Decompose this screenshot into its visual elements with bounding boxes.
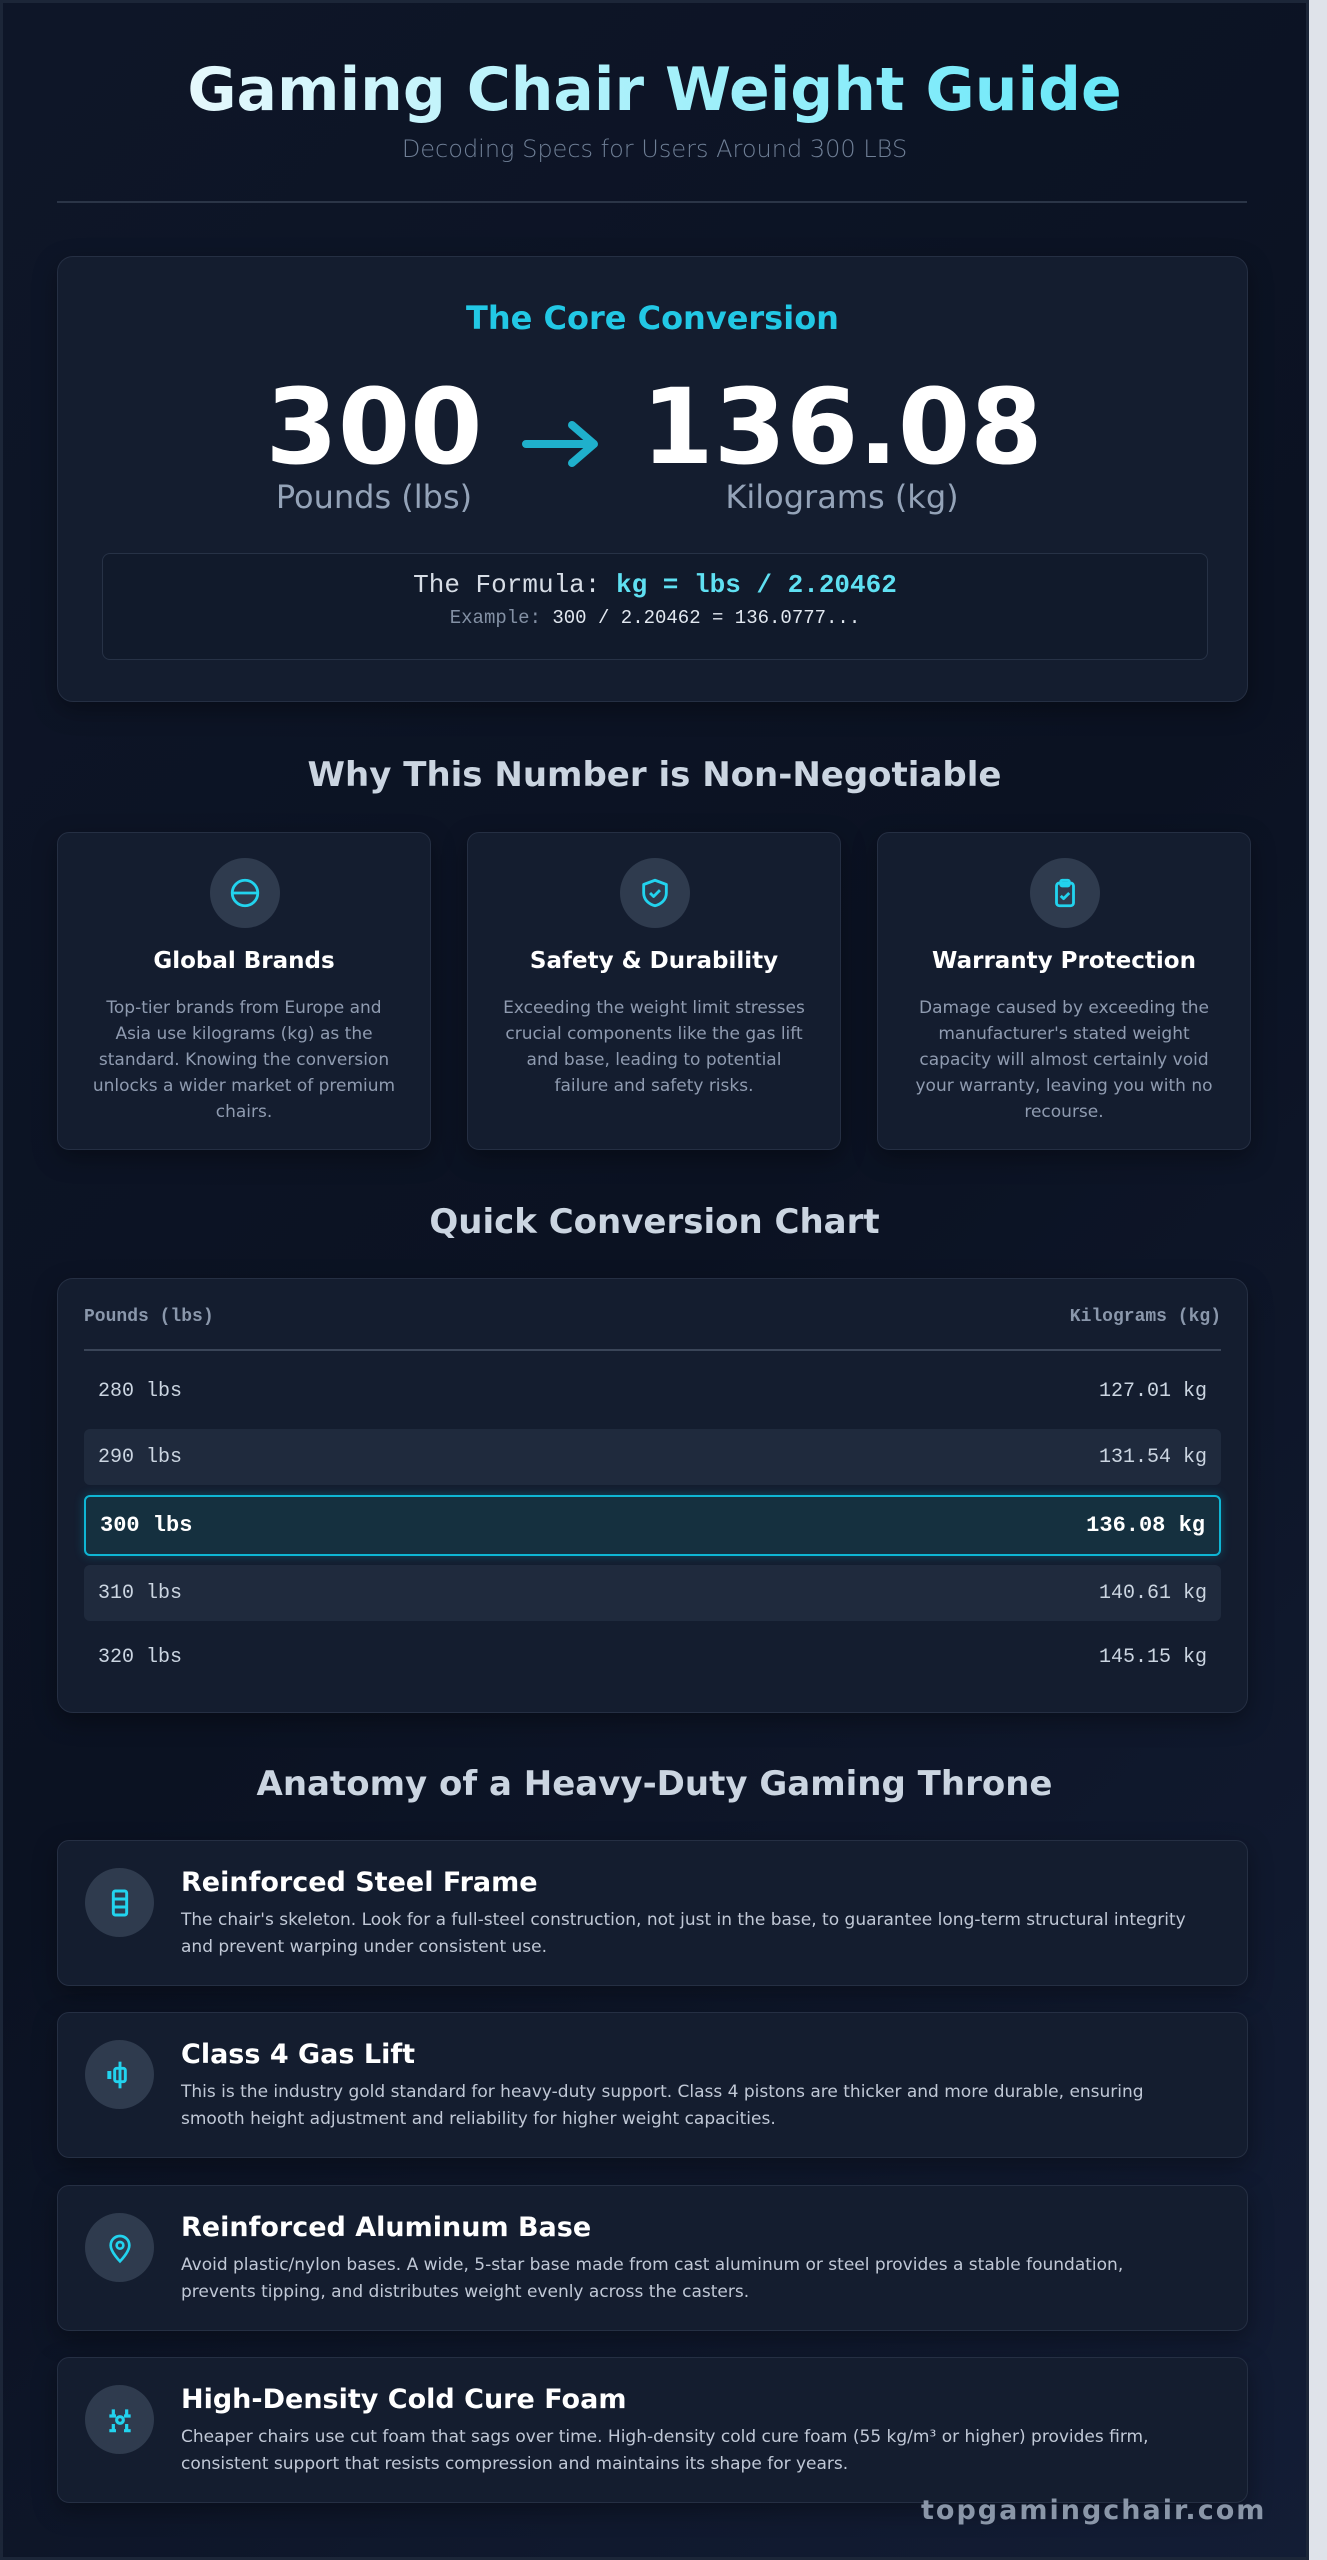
card: foam: High-Density Cold Cure Foam (181, 2384, 626, 2415)
title: Gaming Chair Weight Guide (187, 55, 1122, 125)
formula box (102, 553, 1208, 660)
icon: foam (85, 2385, 154, 2454)
table header: Kilograms (kg) (1070, 1307, 1221, 1327)
card: gas lift: Class 4 Gas Lift (181, 2039, 415, 2070)
row 280 (98, 1380, 1207, 1402)
number: 136.08 kg: Kilograms (kg) (725, 478, 959, 516)
card: foam: Cheaper chairs use cut foam that sags over time. High-density cold cure foam (55 kg/m³ or higher) provides firm, consistent support that resists compression and maintains its shape for years. (181, 2427, 1148, 2474)
card: steel frame: The chair's skeleton. Look for a full-steel construction, not just in the base, to guarantee long-term structural integrity and prevent warping under consistent use. (181, 1910, 1186, 1957)
icon: globe (210, 858, 280, 928)
row 320 (98, 1646, 1207, 1668)
card: safety: Exceeding the weight limit stresses crucial components like the gas lift and base, leading to potential failure and safety risks. (503, 998, 805, 1096)
formula box: The Formula: kg = lbs / 2.20462 (413, 570, 897, 600)
row 310: 310 lbs (98, 1582, 182, 1604)
number: 300 lbs: 300 (265, 366, 483, 488)
icon: clipboard (1030, 858, 1100, 928)
row 300 highlighted: 300 lbs (100, 1513, 192, 1538)
card: gas lift (57, 2012, 1248, 2158)
heading: anatomy: Anatomy of a Heavy-Duty Gaming Throne (257, 1764, 1052, 1804)
row 290 (84, 1429, 1221, 1485)
icon: piston (85, 2040, 154, 2109)
panel: core conversion (57, 256, 1248, 702)
row 280: 127.01 kg (1099, 1380, 1207, 1402)
number: 136.08 kg: 136.08 (641, 366, 1043, 488)
row 310 (84, 1565, 1221, 1621)
card: warranty (877, 832, 1251, 1150)
icon: frame (85, 1868, 154, 1937)
card: aluminum base: Reinforced Aluminum Base (181, 2212, 591, 2243)
icon: shield (620, 858, 690, 928)
row 290: 290 lbs (98, 1446, 182, 1468)
icon: location pin (85, 2213, 154, 2282)
arrow (522, 421, 598, 467)
table: conversion chart (57, 1278, 1248, 1713)
row 310: 140.61 kg (1099, 1582, 1207, 1604)
row 300 highlighted: 136.08 kg (1086, 1513, 1205, 1538)
heading: why non-negotiable: Why This Number is Non-Negotiable (308, 755, 1001, 795)
card: global brands: Global Brands (153, 948, 335, 974)
number: 300 lbs: Pounds (lbs) (276, 478, 472, 516)
watermark: topgamingchair.com (921, 2495, 1266, 2526)
card: steel frame: Reinforced Steel Frame (181, 1867, 538, 1898)
heading: quick conversion chart: Quick Conversion Chart (429, 1202, 880, 1242)
row 320: 145.15 kg (1099, 1646, 1207, 1668)
card: steel frame (57, 1840, 1248, 1986)
row 300 highlighted (84, 1495, 1221, 1556)
table header: Pounds (lbs) (84, 1307, 214, 1327)
card: global brands (57, 832, 431, 1150)
card: foam (57, 2357, 1248, 2503)
card: safety (467, 832, 841, 1150)
card: global brands: Top-tier brands from Europe and Asia use kilograms (kg) as the standard. Knowing the conversion unlocks a wider market of premium chairs. (93, 998, 395, 1122)
card: warranty: Damage caused by exceeding the manufacturer's stated weight capacity will almost certainly void your warranty, leaving you with no recourse. (916, 998, 1212, 1122)
row 280: 280 lbs (98, 1380, 182, 1402)
subtitle: Decoding Specs for Users Around 300 LBS (402, 135, 907, 163)
card: aluminum base: Avoid plastic/nylon bases. A wide, 5-star base made from cast aluminum or steel provides a stable foundation, prevents tipping, and distributes weight evenly across the casters. (181, 2255, 1123, 2302)
card: aluminum base (57, 2185, 1248, 2331)
card: gas lift: This is the industry gold standard for heavy-duty support. Class 4 pistons are thicker and more durable, ensuring smooth height adjustment and reliability for higher weight capacities. (181, 2082, 1144, 2129)
table header (84, 1307, 1221, 1327)
formula box: Example: 300 / 2.20462 = 136.0777... (450, 607, 860, 629)
row 290: 131.54 kg (1099, 1446, 1207, 1468)
card: warranty: Warranty Protection (932, 948, 1196, 974)
card: safety: Safety & Durability (530, 948, 778, 974)
row 320: 320 lbs (98, 1646, 182, 1668)
heading: core conversion: The Core Conversion (466, 299, 839, 337)
